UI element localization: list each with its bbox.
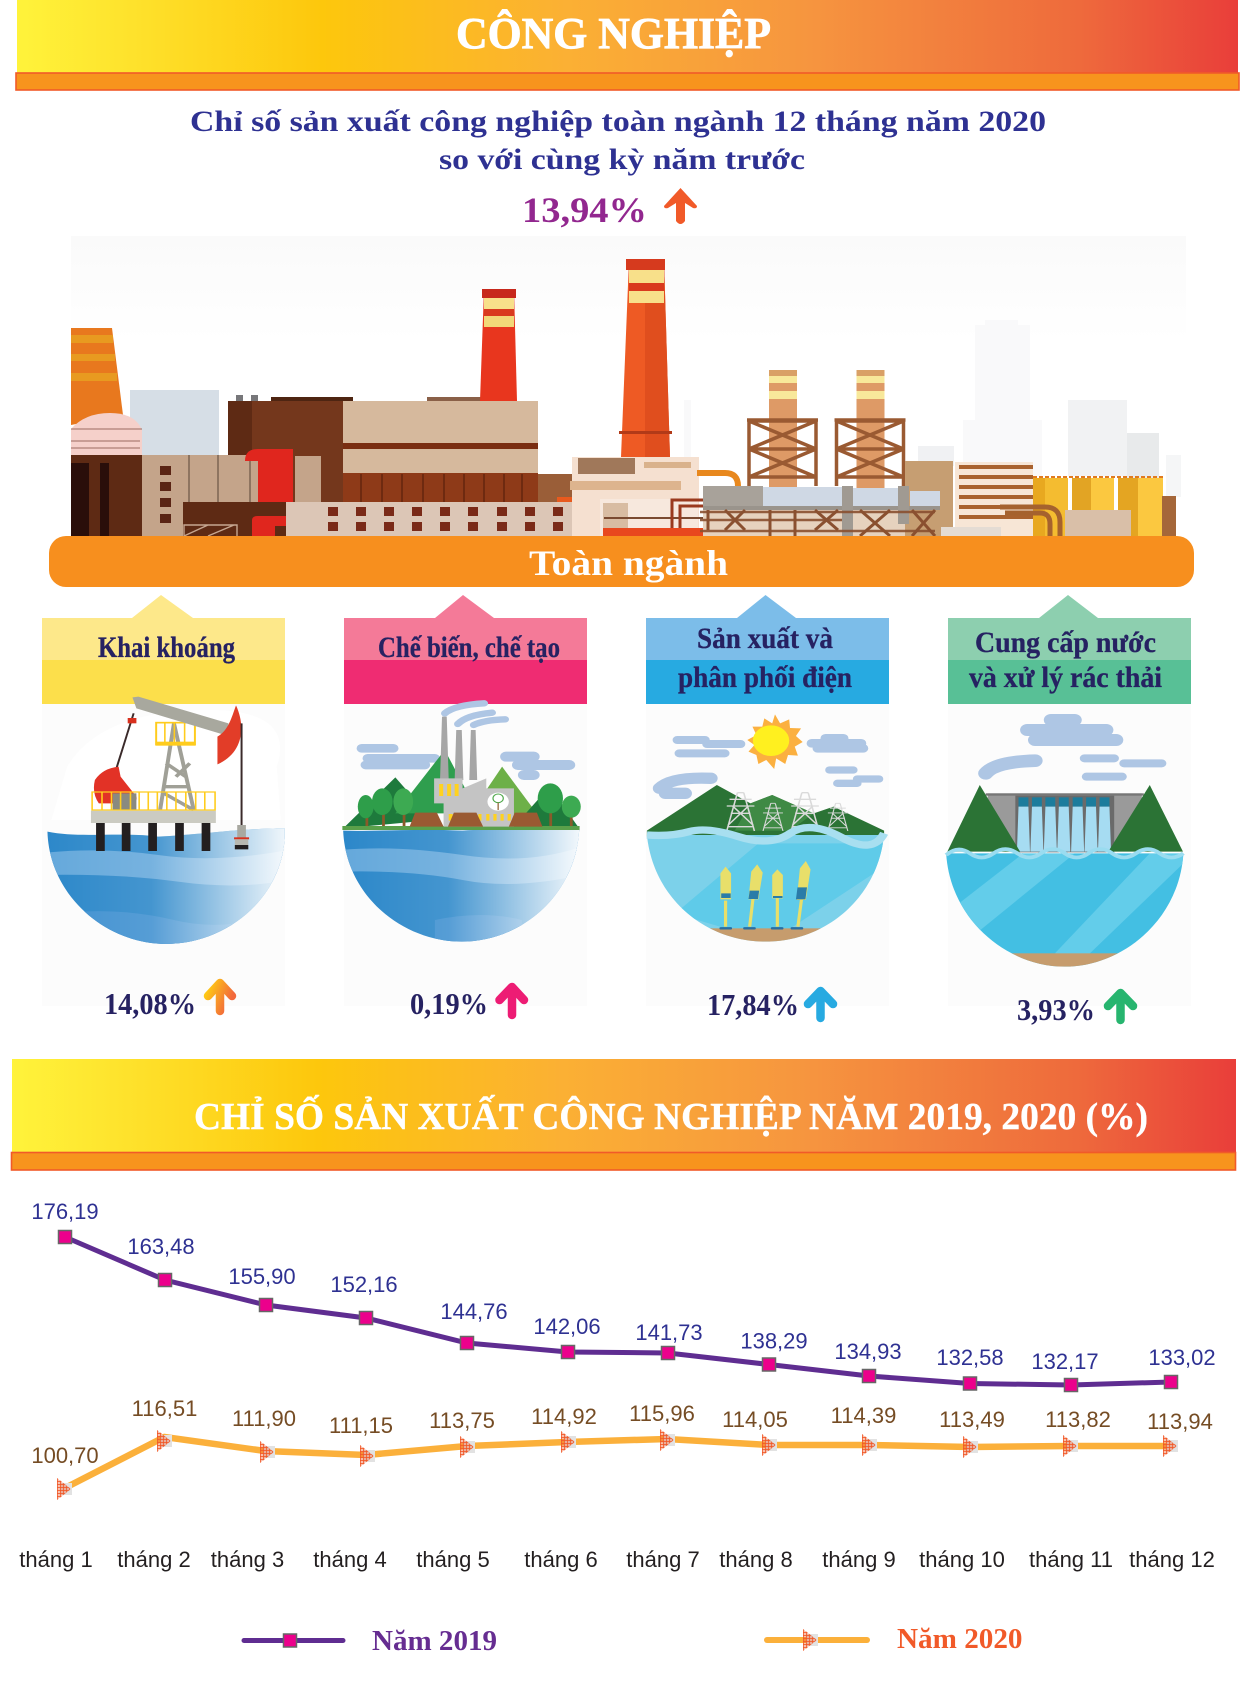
cooling tower	[71, 328, 123, 425]
data labels: 2020: 114,05	[722, 1407, 788, 1432]
x axis month labels: tháng 7	[626, 1547, 700, 1572]
x axis month labels: tháng 9	[822, 1547, 896, 1572]
x axis month labels: tháng 10	[919, 1547, 1005, 1572]
card header: Cung cấp nước	[975, 626, 1156, 659]
panel: Sản xuất và phân phối điện	[644, 595, 889, 1022]
value: 3,93%: 3,93%	[1017, 992, 1095, 1027]
subtitle text block	[190, 105, 1046, 176]
x axis month labels: tháng 8	[719, 1547, 793, 1572]
illustration: industrial skyline	[71, 236, 1186, 536]
subtitle text block: so với cùng kỳ năm trước	[439, 143, 805, 176]
data labels: 2019: 138,29	[740, 1328, 808, 1354]
illustration: hydro dam	[944, 720, 1185, 968]
chimney: tall orange	[619, 259, 672, 457]
legend: Năm 2019: Năm 2019	[372, 1626, 497, 1657]
card header: Sản xuất và	[697, 622, 833, 655]
legend: Năm 2020: Năm 2020	[897, 1624, 1022, 1655]
ribbon: Toàn ngành: Toàn ngành	[529, 543, 728, 583]
card header: phân phối điện	[678, 661, 852, 694]
domed reactor	[71, 413, 142, 536]
value: 17,84%: 17,84%	[707, 987, 799, 1022]
data labels: 2019: 141,73	[635, 1320, 703, 1345]
card header: và xử lý rác thải	[969, 661, 1162, 694]
headline value 13,94% with up arrow	[522, 188, 697, 230]
section banner: chart title	[12, 1059, 1236, 1170]
x axis month labels: tháng 1	[19, 1547, 93, 1572]
data labels: 2020: 115,96	[629, 1401, 695, 1426]
data labels: 2019: 155,90	[228, 1264, 296, 1289]
illustration: solar, mountains, wave energy	[644, 714, 889, 945]
data labels: 2020: 113,94	[1147, 1409, 1213, 1434]
data labels: 2019: 176,19	[31, 1199, 99, 1224]
card header: Khai khoáng	[98, 631, 235, 664]
data labels: 2019: 152,16	[330, 1272, 398, 1297]
red pipe	[245, 449, 293, 503]
chimney: small red	[480, 289, 517, 401]
beige hall	[343, 401, 572, 503]
illustration: green factory on water	[340, 703, 581, 943]
x axis month labels: tháng 12	[1129, 1547, 1215, 1572]
data labels: 2019: 144,76	[440, 1299, 508, 1324]
ribbon: Toàn ngành	[49, 536, 1194, 587]
data labels: 2019: 142,06	[533, 1314, 601, 1339]
data labels: 2019: 132,58	[936, 1345, 1004, 1370]
cream plant building	[570, 457, 738, 536]
x axis month labels: tháng 3	[211, 1547, 284, 1572]
panel: Cung cấp nước và xử lý rác thải	[944, 595, 1191, 1027]
card header	[948, 595, 1191, 704]
series: 2020	[57, 1429, 1178, 1500]
low building with window grid	[286, 497, 601, 536]
pipe block	[700, 486, 940, 536]
card header	[646, 595, 889, 704]
low dark block	[183, 502, 311, 536]
data labels: 2020: 111,15	[329, 1413, 393, 1438]
data labels: 2020: 111,90	[232, 1406, 296, 1431]
data labels: 2020: 116,51	[132, 1396, 197, 1421]
data labels: 2020: 113,49	[939, 1407, 1005, 1432]
headline value 13,94% with up arrow: 13,94%	[522, 190, 647, 230]
yellow tanks	[1000, 477, 1176, 536]
section banner: chart title: CHỈ SỐ SẢN XUẤT CÔNG NGHIỆP NĂM 2019, 2020 (%)	[194, 1094, 1148, 1138]
data labels: 2020	[31, 1396, 1213, 1468]
data labels: 2020: 113,82	[1045, 1407, 1111, 1432]
x axis month labels: tháng 4	[313, 1547, 387, 1572]
data labels: 2019	[31, 1199, 1216, 1374]
icon: up arrow	[500, 987, 524, 1015]
x axis month labels: tháng 11	[1029, 1547, 1113, 1572]
value: 0,19%: 0,19%	[410, 986, 488, 1021]
striped building	[941, 462, 1033, 536]
legend: Năm 2019	[244, 1626, 497, 1657]
card header	[42, 595, 285, 704]
data labels: 2020: 113,75	[429, 1408, 495, 1433]
data labels: 2019: 133,02	[1148, 1345, 1216, 1370]
line chart	[19, 1199, 1216, 1572]
x axis month labels: tháng 6	[524, 1547, 598, 1572]
value: 14,08%: 14,08%	[104, 986, 196, 1021]
x axis month labels	[19, 1547, 1215, 1572]
title: CÔNG NGHIỆP	[456, 9, 771, 58]
main brown block	[228, 395, 353, 521]
x axis month labels: tháng 2	[117, 1547, 191, 1572]
subtitle text block: Chỉ số sản xuất công nghiệp toàn ngành 12 tháng năm 2020	[190, 105, 1046, 138]
data labels: 2019: 163,48	[127, 1234, 195, 1259]
data labels: 2019: 132,17	[1031, 1349, 1099, 1374]
twin chimneys and lattice towers	[747, 370, 906, 495]
icon: up arrow	[1108, 993, 1133, 1020]
card header	[344, 595, 587, 704]
panel: Khai khoáng	[40, 595, 289, 1021]
illustration: offshore oil pump	[40, 697, 289, 947]
data labels: 2020: 114,39	[831, 1403, 896, 1428]
legend: Năm 2020	[767, 1624, 1022, 1655]
data labels: 2020: 114,92	[531, 1404, 597, 1429]
icon: up arrow	[208, 983, 232, 1011]
panel: Chế biến, chế tạo	[340, 595, 587, 1021]
card header: Chế biến, chế tạo	[378, 631, 560, 664]
data labels: 2019: 134,93	[834, 1339, 902, 1364]
icon: up arrow	[808, 991, 833, 1018]
beige annex with windows	[142, 455, 321, 536]
header banner: CÔNG NGHIỆP	[16, 0, 1239, 90]
icon: up arrow	[664, 188, 697, 224]
data labels: 2020: 100,70	[31, 1443, 99, 1468]
series: 2019	[58, 1230, 1178, 1392]
x axis month labels: tháng 5	[416, 1547, 490, 1572]
